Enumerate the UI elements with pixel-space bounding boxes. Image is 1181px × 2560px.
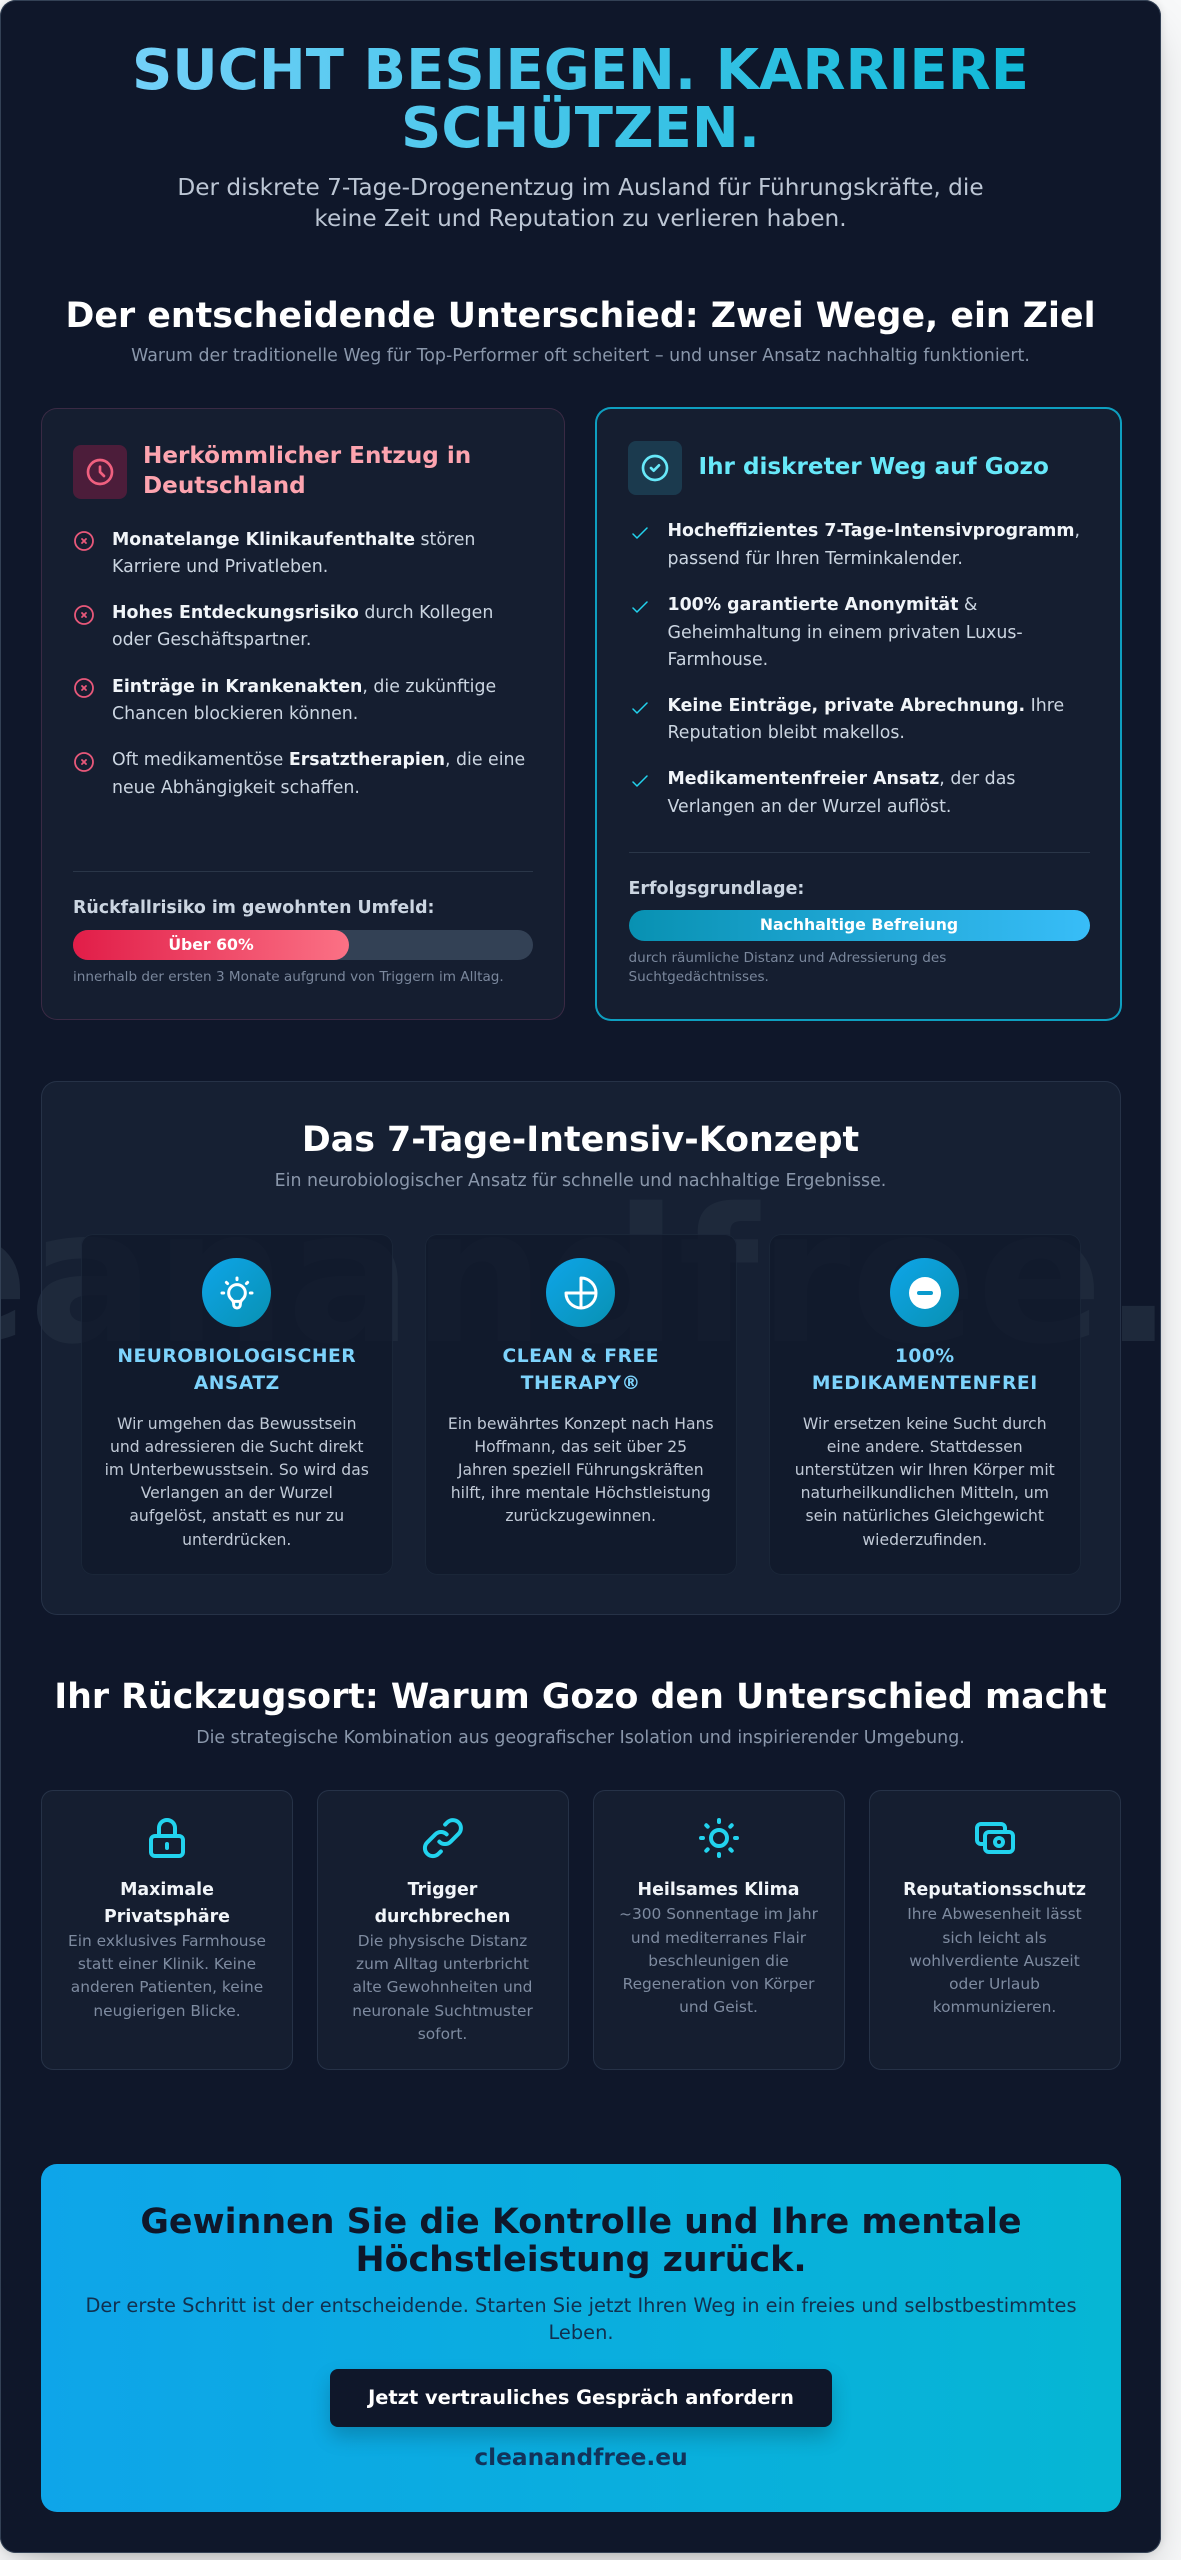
card text: Wir umgehen das Bewusstsein xyxy=(117,1414,356,1432)
card text: alte Gewohnheiten und xyxy=(353,1978,532,1996)
website: cleanandfree.eu xyxy=(474,2444,688,2471)
card text: Regeneration von Körper xyxy=(623,1975,814,1993)
list item 4: neue Abhängigkeit schaffen. xyxy=(112,778,360,798)
list item 1: Monatelange Klinikaufenthalte stören xyxy=(112,530,475,550)
subheading: concept: Ein neurobiologischer Ansatz für schnelle und nachhaltige Ergebnisse. xyxy=(275,1171,886,1191)
card text: kommunizieren. xyxy=(933,1998,1056,2016)
list item 1: passend für Ihren Terminkalender. xyxy=(668,549,963,569)
card heading: MEDIKAMENTENFREI xyxy=(812,1373,1038,1394)
list item 4 xyxy=(74,750,525,798)
list item 2: Farmhouse. xyxy=(668,650,768,670)
icon: lock xyxy=(149,1818,185,1858)
card heading: Maximale xyxy=(120,1880,214,1900)
card text: Wir ersetzen keine Sucht durch xyxy=(803,1414,1047,1432)
label: relapse risk: Rückfallrisiko im gewohnten Umfeld: xyxy=(73,898,434,918)
list item 4: Medikamentenfreier Ansatz, der das xyxy=(668,769,1015,789)
card text: neugierigen Blicke. xyxy=(93,2002,241,2020)
card text: Ein bewährtes Konzept nach Hans xyxy=(448,1414,714,1432)
panel: discreet path on Gozo xyxy=(595,407,1122,1021)
card text: sofort. xyxy=(418,2025,467,2043)
CTA text xyxy=(85,2294,1077,2344)
card heading xyxy=(812,1346,1038,1394)
heading: CTA: Gewinnen Sie die Kontrolle und Ihre mentale xyxy=(140,2202,1022,2242)
icon: check circle xyxy=(628,440,682,494)
panel heading: Deutschland xyxy=(143,473,306,499)
list item 3: Reputation bleibt makellos. xyxy=(668,723,905,743)
card heading: Reputationsschutz xyxy=(903,1880,1086,1900)
title: SCHÜTZEN. xyxy=(401,96,760,161)
note: durch räumliche Distanz und Adressierung des xyxy=(628,950,946,966)
label: basis of success: Erfolgsgrundlage: xyxy=(628,879,804,899)
card: clean and free therapy xyxy=(425,1234,736,1575)
card text: oder Urlaub xyxy=(949,1975,1040,1993)
heading: comparison: Der entscheidende Unterschied: Zwei Wege, ein Ziel xyxy=(65,296,1096,336)
list item 3: Einträge in Krankenakten, die zukünftige xyxy=(112,677,496,697)
card text: unterstützen wir Ihren Körper mit xyxy=(795,1461,1055,1479)
card text xyxy=(448,1414,714,1525)
card text: zum Alltag unterbricht xyxy=(356,1955,529,1973)
subtitle: Der diskrete 7-Tage-Drogenentzug im Ausland für Führungskräfte, die xyxy=(177,174,984,200)
list item 1 xyxy=(632,521,1080,569)
card text: im Unterbewusstsein. So wird das xyxy=(105,1461,369,1479)
list item 4: Verlangen an der Wurzel auflöst. xyxy=(668,797,951,817)
card text xyxy=(907,1905,1082,2016)
panel heading: Ihr diskreter Weg auf Gozo xyxy=(698,454,1049,480)
card text: und adressieren die Sucht direkt xyxy=(110,1438,364,1456)
card heading: NEUROBIOLOGISCHER xyxy=(117,1346,356,1367)
card text: Die physische Distanz xyxy=(358,1932,527,1950)
progress bar: lasting liberation xyxy=(628,910,1090,941)
list item 1: Hocheffizientes 7-Tage-Intensivprogramm, xyxy=(668,521,1080,541)
progress bar: lasting liberation: Nachhaltige Befreiung xyxy=(760,915,958,934)
card text: anderen Patienten, keine xyxy=(71,1978,263,1996)
card text: Ihre Abwesenheit lässt xyxy=(907,1905,1082,1923)
card text: unterdrücken. xyxy=(182,1531,291,1549)
subheading: comparison: Warum der traditionelle Weg für Top-Performer oft scheitert – und unser Ansatz nachhaltig funktioniert. xyxy=(131,346,1030,366)
CTA text: Der erste Schritt ist der entscheidende. Starten Sie jetzt Ihren Weg in ein freies und selbstbestimmtes xyxy=(85,2294,1077,2317)
card text: wiederzufinden. xyxy=(862,1531,987,1549)
list item 1: Karriere und Privatleben. xyxy=(112,557,328,577)
card text: sich leicht als xyxy=(942,1929,1047,1947)
icon: minus circle xyxy=(890,1258,959,1327)
icon: sun xyxy=(699,1818,739,1858)
note: innerhalb der ersten 3 Monate aufgrund von Triggern im Alltag. xyxy=(73,968,504,984)
subtitle: keine Zeit und Reputation zu verlieren haben. xyxy=(314,205,847,232)
card text: statt einer Klinik. Keine xyxy=(78,1955,256,1973)
card text: Hoffmann, das seit über 25 xyxy=(474,1438,687,1456)
icon: cash xyxy=(975,1822,1015,1854)
note xyxy=(628,950,946,985)
panel heading xyxy=(143,443,471,499)
card heading: Privatsphäre xyxy=(104,1906,230,1926)
panel: call to action xyxy=(41,2164,1121,2512)
card heading xyxy=(117,1346,356,1394)
card heading xyxy=(502,1346,659,1394)
card: medication free xyxy=(769,1234,1080,1575)
list item 2 xyxy=(74,603,493,650)
card text: beschleunigen die xyxy=(648,1952,789,1970)
list item 2: Geheimhaltung in einem privaten Luxus- xyxy=(668,623,1023,643)
list item 3: Chancen blockieren können. xyxy=(112,704,358,724)
bar fill xyxy=(73,930,349,960)
card text: aufgelöst, anstatt es nur zu xyxy=(129,1507,344,1525)
progress bar: relapse risk over 60% xyxy=(73,930,533,960)
card text: Jahren speziell Führungskräften xyxy=(458,1461,704,1479)
card heading xyxy=(104,1880,230,1926)
heading: CTA: Höchstleistung zurück. xyxy=(355,2240,807,2280)
card: break triggers xyxy=(316,1790,568,2070)
list item 3 xyxy=(632,696,1064,743)
card text: sein natürliches Gleichgewicht xyxy=(806,1507,1044,1525)
card heading xyxy=(375,1880,510,1926)
list item 3: Keine Einträge, private Abrechnung. Ihre xyxy=(668,696,1064,716)
list item 1 xyxy=(74,530,475,577)
list item 2 xyxy=(632,595,1023,670)
bar fill: Über 60% xyxy=(168,935,254,954)
card heading: Heilsames Klima xyxy=(638,1880,799,1900)
note: Suchtgedächtnisses. xyxy=(628,969,769,985)
card text: und mediterranes Flair xyxy=(631,1929,806,1947)
card text: naturheilkundlichen Mitteln, um xyxy=(801,1484,1049,1502)
card text: Verlangen an der Wurzel xyxy=(141,1484,333,1502)
panel: conventional withdrawal xyxy=(41,408,565,1020)
list item 3 xyxy=(74,677,496,724)
list item 2: 100% garantierte Anonymität & xyxy=(668,595,977,615)
card heading: 100% xyxy=(895,1346,955,1367)
card: healing climate xyxy=(592,1790,844,2070)
card text xyxy=(105,1414,369,1549)
card text: ~300 Sonnentage im Jahr xyxy=(619,1905,818,1923)
card heading: THERAPY® xyxy=(521,1373,641,1394)
heading: CTA xyxy=(140,2202,1022,2280)
title: SUCHT BESIEGEN. KARRIERE xyxy=(132,38,1029,103)
card text: hilft, ihre mentale Höchstleistung xyxy=(451,1484,711,1502)
card text xyxy=(619,1905,818,2016)
card heading: CLEAN & FREE xyxy=(502,1346,659,1367)
list item 2: oder Geschäftspartner. xyxy=(112,630,311,650)
panel heading: Herkömmlicher Entzug in xyxy=(143,443,471,469)
card text: eine andere. Stattdessen xyxy=(827,1438,1023,1456)
button: Jetzt vertrauliches Gespräch anfordern xyxy=(368,2386,794,2409)
list item 4 xyxy=(632,769,1015,817)
card text xyxy=(795,1414,1055,1549)
card: reputation protection xyxy=(868,1790,1120,2070)
subtitle xyxy=(177,174,984,232)
card text: wohlverdiente Auszeit xyxy=(909,1952,1080,1970)
button xyxy=(330,2369,832,2427)
card: neurobiological approach xyxy=(81,1234,392,1575)
icon: light bulb xyxy=(202,1258,271,1327)
card: maximum privacy xyxy=(41,1790,293,2070)
subheading: retreat: Die strategische Kombination aus geografischer Isolation und inspirierender Umgebung. xyxy=(196,1728,965,1748)
card heading: ANSATZ xyxy=(194,1373,280,1394)
icon: clock xyxy=(73,445,127,499)
heading: concept: Das 7-Tage-Intensiv-Konzept xyxy=(302,1120,859,1160)
card heading: Trigger xyxy=(408,1880,477,1900)
panel: 7-day concept xyxy=(41,1081,1121,1615)
card text: zurückzugewinnen. xyxy=(505,1507,656,1525)
icon: chart pie xyxy=(546,1258,615,1327)
card text: neuronale Suchtmuster xyxy=(352,2002,533,2020)
title xyxy=(41,42,1120,157)
CTA text: Leben. xyxy=(548,2321,614,2344)
icon: link xyxy=(422,1818,463,1858)
card text xyxy=(352,1932,533,2043)
heading: retreat: Ihr Rückzugsort: Warum Gozo den Unterschied macht xyxy=(54,1677,1107,1717)
list item 2: Hohes Entdeckungsrisiko durch Kollegen xyxy=(112,603,493,623)
card heading: durchbrechen xyxy=(375,1906,510,1926)
card text: Ein exklusives Farmhouse xyxy=(68,1932,266,1950)
card text xyxy=(68,1932,266,2020)
list item 4: Oft medikamentöse Ersatztherapien, die eine xyxy=(112,750,525,770)
card text: und Geist. xyxy=(679,1998,758,2016)
